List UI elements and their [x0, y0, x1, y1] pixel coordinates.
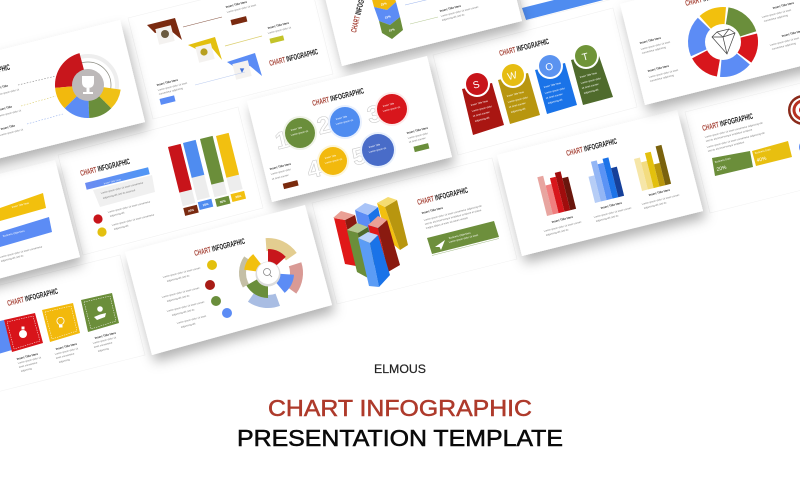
captions [16, 331, 117, 373]
T card: adipiscing elit [584, 88, 599, 95]
body text: Lorem ipsum dolor sit amet consectetur adipiscing elit [424, 205, 482, 222]
yellow band [0, 193, 46, 221]
captions: Insert Title Here [600, 201, 623, 210]
left note with button: Insert Title Here [269, 162, 292, 171]
dark blue circle 5: Insert Title [369, 143, 381, 149]
red circle 3 [364, 92, 409, 129]
dark blue circle 5: Lorem ipsum do [369, 147, 387, 154]
legend text [162, 266, 207, 329]
S card: adipiscing elit [475, 116, 490, 123]
title: CHART INFOGRAPHIC [193, 237, 246, 258]
subtitle: PRESENTATION TEMPLATE [237, 425, 563, 451]
left labels [639, 36, 679, 83]
captions: amet consectetur [19, 361, 38, 369]
green circle 1: Lorem ipsum do [291, 130, 309, 137]
dashed connectors [18, 76, 63, 124]
yellow column: 25% [235, 194, 242, 199]
green stat card [712, 151, 753, 176]
T card: Lorem ipsum dolor [581, 77, 601, 85]
blue corner icon [227, 53, 262, 80]
panel: sector donut slide [125, 205, 332, 355]
red column [168, 144, 199, 216]
blue circle 2: Insert Title [336, 115, 348, 121]
captions: Insert Title Here [16, 352, 39, 361]
yellow bullet: adipiscing elit [114, 224, 129, 231]
blue circle 2 [314, 105, 362, 140]
body text [705, 122, 765, 153]
captions: adipiscing elit sed do [596, 214, 619, 223]
left note with button: Lorem ipsum dolor [271, 168, 291, 176]
legend text: Lorem ipsum dolor sit amet consec [162, 286, 201, 299]
connector lines [183, 17, 262, 85]
panel: top blue slide [500, 0, 705, 21]
panel: numbered circles slide [247, 56, 452, 202]
left labels: Lorem ipsum dolor sit amet [641, 41, 671, 51]
labels: Insert Title Here [439, 4, 462, 13]
right labels: Lorem ipsum dolor sit amet [762, 9, 792, 19]
body text: magna aliqua ut enim ad minim veniam [426, 217, 468, 230]
blue square [0, 320, 12, 360]
legend text: Lorem ipsum dolor sit amet consec [167, 300, 206, 313]
side note with button [406, 126, 429, 152]
O card: adipiscing elit [548, 98, 563, 105]
O card [535, 53, 577, 114]
captions: adipiscing elit sed do [644, 201, 667, 210]
blue column [183, 140, 213, 210]
S card: S [472, 79, 481, 92]
W card: sit amet consec [509, 102, 527, 109]
red circle 3: 3 [364, 100, 384, 129]
captions: amet consectetur [94, 341, 113, 349]
chevron stack: 25% [380, 1, 387, 7]
yellow corner icon [188, 37, 222, 63]
yellow bulb square [42, 303, 80, 342]
captions: Insert Title Here [55, 342, 78, 351]
red bullet [93, 200, 151, 224]
left labels: Lorem ipsum dolor sit amet [649, 69, 679, 79]
S card: Lorem ipsum dolor [472, 105, 492, 113]
W card [498, 62, 540, 124]
dark blue circle 5 [349, 132, 396, 171]
panel: 3D columns slide [312, 158, 517, 304]
chevron stack: 10% [388, 27, 395, 33]
green column [200, 136, 231, 207]
labels: Lorem ipsum dolor sit [0, 128, 24, 137]
S card: Insert Title Here [471, 100, 489, 107]
right labels [762, 1, 800, 51]
yellow circle 4: Insert Title [325, 154, 337, 160]
blue heading band: Insert Title Here [104, 178, 122, 185]
brand name: ELMOUS [374, 362, 426, 376]
O card: O [544, 61, 555, 74]
panel: top donut slide [0, 20, 145, 167]
grey text box [93, 175, 155, 207]
blue circle 2: Lorem ipsum do [336, 119, 354, 126]
panel: diamond donut slide [620, 0, 800, 105]
legend text: Lorem ipsum dolor sit amet consec [163, 266, 202, 279]
legend dots [205, 260, 232, 318]
green column: 30% [219, 199, 227, 204]
grey text box: adipiscing elit sed do eiusmod [103, 189, 136, 200]
blue column: 15% [202, 202, 209, 207]
O card: Lorem ipsum dolor [545, 87, 565, 95]
labels and buttons [156, 0, 292, 105]
T card [571, 43, 613, 105]
blue dot [799, 140, 800, 154]
labels: Lorem ipsum dolor sit amet consec [441, 5, 480, 18]
blue heading band [85, 167, 150, 190]
red bullet: Lorem ipsum dolor sit amet consectetur [108, 200, 151, 214]
right labels: Lorem ipsum dolor sit amet [770, 37, 800, 47]
legend text: Lorem ipsum dolor sit amet [177, 315, 207, 325]
right labels: Insert Title Here [772, 1, 795, 10]
W card: adipiscing elit [511, 107, 526, 114]
side note with button: Lorem ipsum dolor [408, 132, 428, 140]
T card: Insert Title Here [580, 72, 598, 79]
yellow stat card [752, 141, 792, 166]
title: CHART INFOGRAPHIC [565, 137, 618, 158]
left labels: consectetur adipiscing [642, 46, 667, 55]
red bar group [537, 170, 576, 216]
blue band: Business Objectives [3, 229, 26, 238]
donut chart [55, 53, 121, 118]
captions [544, 188, 681, 237]
red money square [4, 313, 43, 352]
yellow bullet [97, 213, 155, 237]
captions: Lorem ipsum dolor sit [55, 347, 79, 356]
green callout: Business Objectives [449, 231, 472, 240]
yellow bullet: Lorem ipsum dolor sit amet consectetur [112, 213, 155, 227]
red column: 20% [188, 208, 195, 213]
labels and buttons: Lorem ipsum dolor sit amet [227, 4, 257, 14]
title: CHART INFOGRAPHIC [268, 47, 319, 68]
labels and buttons: Insert Title Here [156, 78, 179, 87]
title: CHART INFOGRAPHIC [6, 287, 59, 308]
leader lines [405, 0, 438, 24]
body text: sed do eiusmod tempor incididunt [708, 141, 745, 153]
labels and buttons: Lorem ipsum dolor sit amet [158, 82, 188, 92]
captions: Insert Title Here [648, 188, 671, 197]
panel: three circles slide (bars) [58, 107, 263, 255]
blue bar group [585, 156, 624, 203]
O card: Insert Title Here [544, 82, 562, 89]
left labels: consectetur adipiscing [650, 74, 675, 83]
panel: icon chevrons slide [128, 0, 333, 119]
red circle 3: Lorem ipsum do [383, 106, 401, 113]
labels: adipiscing elit sed do [442, 13, 465, 22]
body text: adipiscing elit sed do [1, 254, 24, 263]
yellow circle 4: 4 [304, 155, 325, 184]
captions: adipiscing [21, 367, 33, 373]
yellow stat card: 40% [756, 156, 768, 164]
T card: sit amet consec [582, 83, 600, 90]
labels [438, 0, 480, 22]
captions: Insert Title Here [94, 331, 117, 340]
green stat card: 20% [716, 165, 728, 173]
captions: Lorem ipsum dolor sit [93, 336, 117, 345]
grey text box: Lorem ipsum dolor sit amet consectetur [101, 181, 144, 195]
main title: CHART INFOGRAPHIC [268, 395, 532, 421]
body text: Lorem ipsum dolor sit amet consectetur adipiscing elit [705, 122, 763, 139]
target icon [788, 95, 800, 125]
yellow circle 4: Lorem ipsum do [325, 158, 343, 165]
yellow circle 4 [304, 145, 349, 184]
body text: sed do eiusmod tempor incididunt ut labore et dolore [425, 209, 482, 226]
panel: target slide [685, 67, 800, 213]
legend text: adipiscing elit sed do [167, 274, 190, 283]
yellow stat card: Business Data [755, 148, 771, 155]
green circle 1: 1 [272, 126, 292, 155]
chevron stack [370, 0, 403, 39]
captions: Lorem ipsum dolor sit amet consec [594, 206, 633, 219]
body text: Lorem ipsum dolor sit amet consectetur [0, 245, 43, 259]
panel: SWOT slide [433, 8, 637, 155]
labels [0, 83, 24, 137]
right labels: consectetur adipiscing [764, 14, 789, 23]
yellow bar group [632, 145, 671, 191]
W card: W [506, 70, 519, 83]
segmented donut [688, 7, 758, 77]
captions: adipiscing [59, 358, 71, 364]
captions: Lorem ipsum dolor sit amet consec [544, 220, 583, 233]
left note with button: sit amet consec [272, 174, 290, 181]
captions: amet consectetur [56, 352, 75, 360]
3D column chart [333, 197, 408, 287]
labels and buttons: Insert Title Here [267, 21, 290, 30]
green circle 1 [272, 116, 317, 155]
labels and buttons: consectetur adipiscing [159, 87, 184, 96]
body text: Lorem ipsum dolor sit amet consectetur adipiscing elit [707, 132, 765, 149]
body text: Insert Title Here [421, 206, 444, 215]
O card: sit amet consec [546, 93, 564, 100]
brown corner icon [147, 18, 182, 45]
blue corner icon: ▾ [240, 65, 245, 75]
legend text: adipiscing elit sed do [167, 294, 190, 303]
W card: Lorem ipsum dolor [508, 96, 528, 104]
title: CHART INFOGRAPHIC [498, 37, 550, 58]
blue band [0, 217, 52, 247]
yellow band: Insert Title Here [12, 202, 30, 209]
captions: adipiscing elit sed do [546, 228, 569, 237]
diamond icon [712, 29, 735, 54]
left note with button [269, 162, 299, 189]
left labels: Insert Title Here [639, 36, 662, 45]
S card [462, 71, 504, 135]
body text [421, 205, 482, 230]
captions: Insert Title Here [551, 215, 574, 224]
T card: T [581, 51, 590, 64]
dark blue circle 5: 5 [349, 142, 369, 171]
title: CHART INFOGRAPHIC [311, 86, 365, 108]
side note with button: sit amet consec [409, 137, 427, 144]
red circle 3: Insert Title [383, 102, 395, 108]
S card: sit amet consec [473, 111, 491, 118]
title: CHART INFOGRAPHIC [416, 186, 469, 207]
green circle 1: Insert Title [291, 126, 303, 132]
title: CHART INFOGRAPHIC [701, 112, 754, 133]
captions: Lorem ipsum dolor sit amet consec [642, 193, 681, 206]
labels: Insert Title [0, 123, 16, 131]
blue circle 2: 2 [314, 111, 334, 140]
captions: adipiscing [98, 347, 110, 353]
green stat card: Business Data [715, 157, 731, 164]
green hand square [81, 293, 119, 332]
green callout [427, 221, 499, 256]
labels and buttons: Insert Title Here [225, 0, 248, 9]
right labels: consectetur adipiscing [772, 42, 797, 51]
panel: left mid band slide [0, 160, 80, 305]
left labels: Insert Title Here [647, 64, 670, 73]
panel: square icons slide [0, 255, 145, 400]
captions: Lorem ipsum dolor sit [18, 356, 42, 365]
chevron stack: 15% [384, 14, 391, 20]
W card: Insert Title Here [507, 91, 525, 98]
red bullet: adipiscing elit [110, 211, 125, 218]
sector chart [239, 238, 303, 308]
panel: grouped bars slide [497, 110, 703, 256]
legend text: adipiscing elit [181, 322, 196, 329]
title: CHART INFOGRAPHIC [79, 157, 131, 178]
body text: sed do eiusmod tempor incididunt ut labore [706, 128, 753, 143]
green callout: Lorem ipsum dolor sit amet [449, 234, 479, 244]
legend text: adipiscing elit sed do [172, 308, 195, 317]
yellow column [216, 133, 246, 202]
panel: chevron slide [317, 0, 522, 66]
side note with button: Insert Title Here [406, 126, 429, 135]
labels and buttons: Lorem ipsum dolor sit [268, 26, 292, 35]
